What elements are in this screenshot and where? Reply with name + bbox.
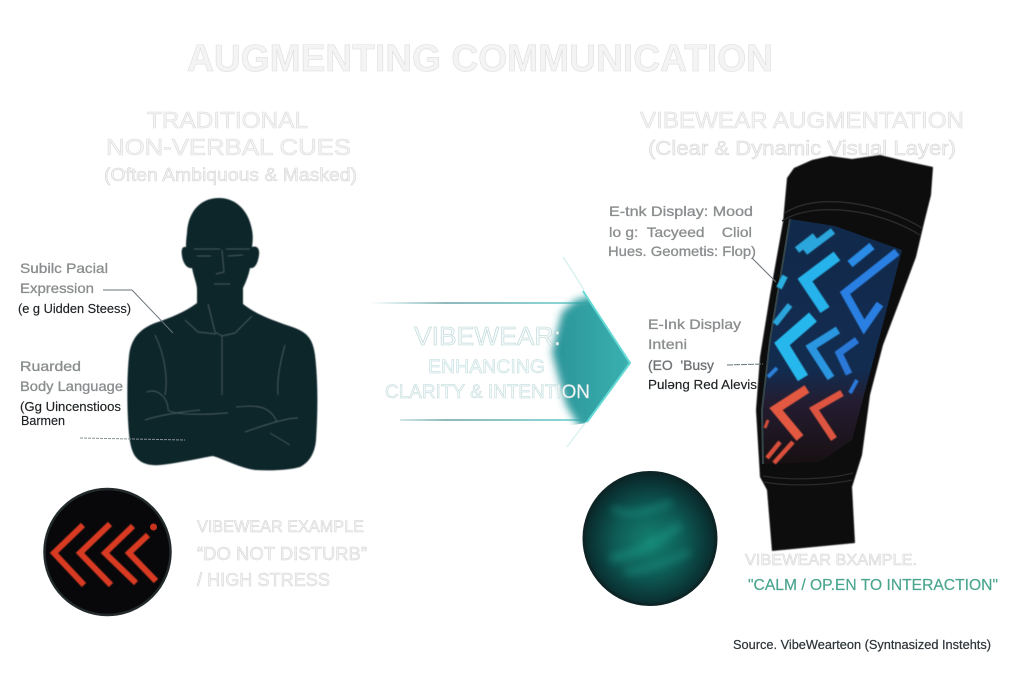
red chevrons (765, 389, 842, 463)
sleeve with e-ink display (756, 155, 933, 551)
callout: intent display: (EO 'Busy (648, 357, 714, 373)
icon: red chevron badge (44, 489, 170, 615)
central arrow (370, 257, 640, 447)
callout: intent display: E-Ink Display (648, 316, 741, 332)
callout: facial expression (18, 260, 173, 333)
display panel (762, 219, 902, 464)
person silhouette (127, 198, 317, 470)
callout: body language: (Gg Uincenstioos (20, 400, 121, 414)
source note: Source. VibeWearteon (Syntnasized Instehts) (733, 638, 991, 652)
heading: vibewear augmentation: (Clear & Dynamic Visual Layer) (648, 138, 956, 160)
arrow label: ENHANCING (428, 357, 545, 378)
example text: do not disturb: “DO NOT DISTURB” (197, 544, 367, 564)
example text: calm (745, 552, 998, 594)
callout: facial expression: Subilc Pacial (20, 260, 108, 276)
heading: vibewear augmentation: VIBEWEAR AUGMENTATION (640, 107, 964, 133)
example text: calm: VIBEWEAR BXAMPLE. (745, 552, 917, 569)
heading: traditional non-verbal cues: (Often Ambiquous & Masked) (104, 165, 357, 185)
callout: mood display (608, 203, 776, 282)
heading: traditional non-verbal cues (104, 107, 357, 185)
example text: do not disturb: VIBEWEAR EXAMPLE (197, 517, 364, 536)
callout: body language: Body Language (20, 378, 123, 394)
panel: vibewear augmentation (584, 107, 998, 604)
callout: mood display: E-tnk Display: Mood (609, 203, 753, 219)
callout: intent display: Inteni (648, 336, 687, 352)
arrow label: VIBEWEAR: (414, 321, 561, 351)
callout: body language: Barmen (21, 414, 65, 428)
example text: do not disturb (197, 517, 367, 590)
example text: calm: "CALM / OP.EN TO INTERACTION" (748, 577, 998, 594)
title: AUGMENTING COMMUNICATION (187, 38, 773, 80)
callout: mood display: Hues. Geometis: Flop) (608, 243, 756, 259)
callout: mood display: lo g: Tacyeed Cliol (609, 224, 752, 240)
example text: do not disturb: / HIGH STRESS (197, 570, 330, 590)
arrow label: CLARITY & INTENTION (385, 382, 590, 403)
heading: traditional non-verbal cues: TRADITIONAL (147, 107, 308, 133)
icon: teal calm badge (584, 472, 716, 604)
heading: traditional non-verbal cues: NON-VERBAL CUES (106, 134, 351, 160)
callout: facial expression: Expression (20, 280, 94, 296)
callout: body language: Ruarded (20, 358, 81, 374)
heading: vibewear augmentation (640, 107, 964, 160)
panel: traditional cues (18, 107, 367, 615)
callout: facial expression: (e g Uidden Steess) (18, 302, 131, 316)
arrow label (385, 321, 590, 403)
callout: intent display (648, 316, 763, 392)
callout: body language (20, 358, 185, 440)
callout: intent display: Pulǝng Red Alevis (648, 378, 757, 392)
blue chevrons (768, 231, 897, 393)
